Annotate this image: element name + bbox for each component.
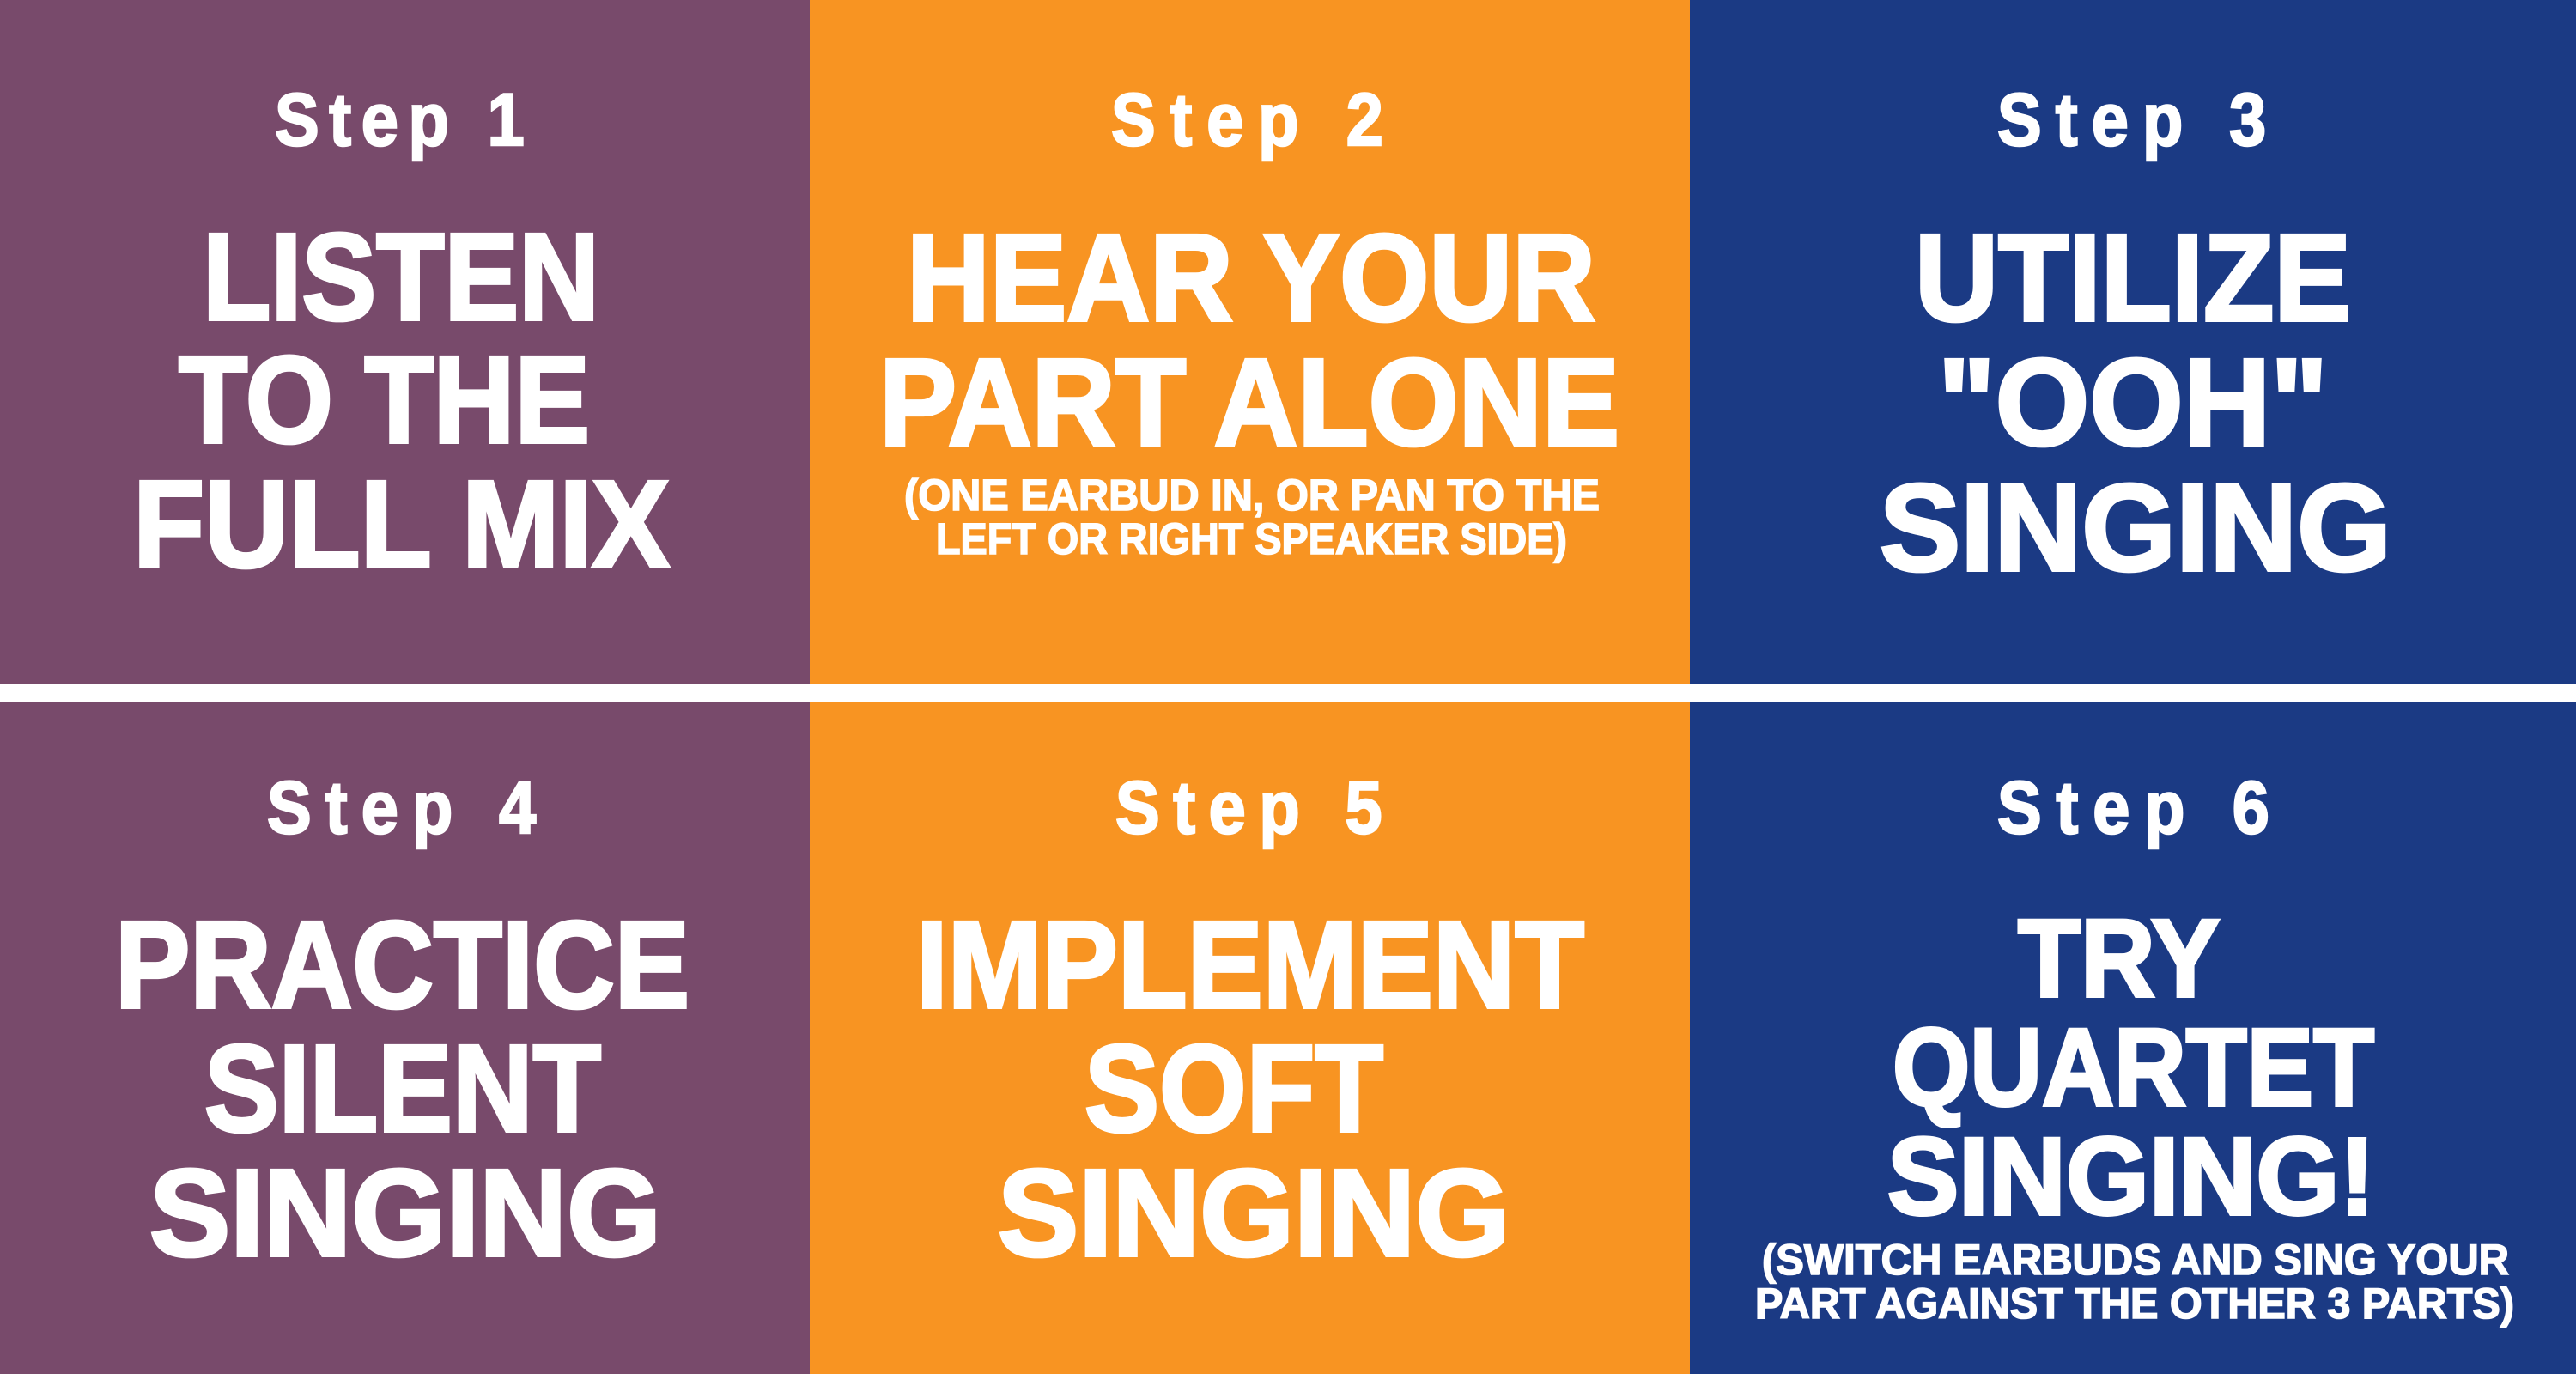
heading: implement soft singing: IMPLEMENT <box>916 896 1584 1034</box>
step label: Step 1: Step 1 <box>275 79 525 161</box>
heading: utilize ooh singing <box>1880 209 2391 597</box>
heading: listen to the full mix <box>133 208 670 593</box>
step label: Step 5: Step 5 <box>1115 767 1382 849</box>
step label: Step 3: Step 3 <box>1997 79 2266 161</box>
heading: listen to the full mix: TO THE <box>179 331 590 469</box>
panel background: navy <box>1690 702 2576 1374</box>
heading: implement soft singing <box>916 896 1584 1282</box>
heading: listen to the full mix: FULL MIX <box>133 455 670 593</box>
heading: listen to the full mix: LISTEN <box>203 208 599 346</box>
panel background: purple <box>0 0 810 684</box>
panel: step 2 <box>810 0 1690 684</box>
heading: try quartet singing: QUARTET <box>1893 1006 2374 1129</box>
heading: implement soft singing: SOFT <box>1084 1019 1383 1158</box>
note: earbud or panning instruction <box>904 471 1600 563</box>
note: earbud or panning instruction: LEFT OR RIGHT SPEAKER SIDE) <box>936 514 1567 563</box>
panel: step 4 <box>0 702 810 1374</box>
note: switch earbuds instruction <box>1755 1236 2514 1328</box>
note: switch earbuds instruction: PART AGAINST THE OTHER 3 PARTS) <box>1755 1280 2514 1328</box>
panel background: purple <box>0 702 810 1374</box>
heading: utilize ooh singing: UTILIZE <box>1915 209 2351 347</box>
heading: practice silent singing: PRACTICE <box>115 896 690 1034</box>
step label: Step 6: Step 6 <box>1997 767 2269 849</box>
heading: utilize ooh singing: SINGING <box>1880 459 2391 597</box>
heading: try quartet singing: SINGING! <box>1887 1116 2375 1238</box>
panel: step 5 <box>810 702 1690 1374</box>
panel background: orange <box>810 702 1690 1374</box>
panel: step 1 <box>0 0 810 684</box>
step label: Step 2: Step 2 <box>1111 79 1383 161</box>
panel background: orange <box>810 0 1690 684</box>
heading: practice silent singing <box>115 896 690 1282</box>
heading: hear your part alone <box>879 209 1619 471</box>
heading: implement soft singing: SINGING <box>998 1144 1510 1282</box>
note: earbud or panning instruction: (ONE EARBUD IN, OR PAN TO THE <box>904 471 1600 520</box>
heading: try quartet singing: TRY <box>2018 897 2220 1020</box>
divider: white horizontal band <box>0 684 2576 702</box>
panel background: navy <box>1690 0 2576 684</box>
heading: practice silent singing: SINGING <box>149 1144 661 1282</box>
note: switch earbuds instruction: (SWITCH EARBUDS AND SING YOUR <box>1762 1236 2509 1284</box>
heading: practice silent singing: SILENT <box>204 1019 601 1158</box>
heading: hear your part alone: PART ALONE <box>879 333 1619 471</box>
heading: hear your part alone: HEAR YOUR <box>907 209 1595 347</box>
step label: Step 4: Step 4 <box>267 767 537 849</box>
heading: utilize ooh singing: "OOH" <box>1938 333 2328 471</box>
heading: try quartet singing <box>1887 897 2375 1238</box>
panel: step 6 <box>1690 702 2576 1374</box>
panel: step 3 <box>1690 0 2576 684</box>
